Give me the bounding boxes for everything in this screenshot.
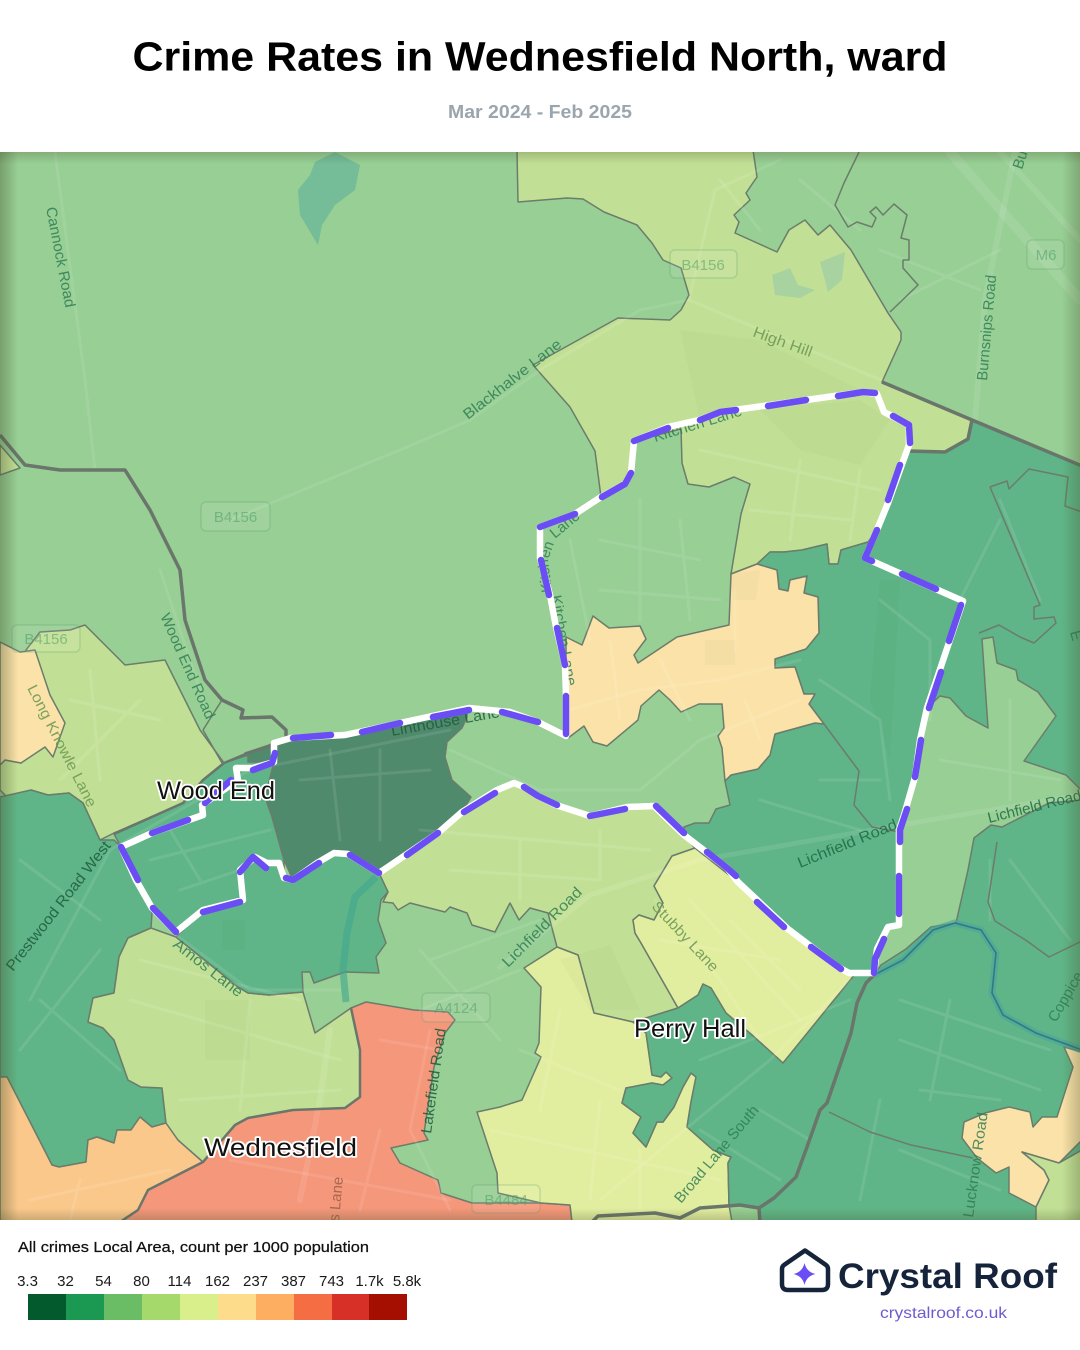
legend scale values (17, 1273, 422, 1290)
area: ward darkest green (245, 710, 471, 880)
area: east dark green (759, 420, 1080, 1222)
area: west dark green (0, 790, 166, 1167)
logo: Crystal Roof (782, 1250, 1057, 1322)
place labels: Wednesfield (204, 1134, 357, 1162)
title: Crime Rates in Wednesfield North, ward (132, 34, 948, 80)
legend scale values: 1.7k (355, 1273, 384, 1290)
road labels: Lichfield Road (986, 787, 1080, 827)
road labels: Long Knowle Lane (23, 682, 100, 810)
road labels: Linthouse Lane (390, 704, 501, 740)
subtitle: date range: Mar 2024 - Feb 2025 (448, 102, 632, 122)
road labels: Lucknow Road (960, 1111, 992, 1219)
road labels: Lichfield Road (499, 884, 586, 971)
thin local boundaries (203, 152, 1080, 1158)
area: ward inner east dark green (684, 542, 963, 973)
road labels (6, 152, 1080, 1220)
road shields (12, 240, 1064, 1213)
road labels: Wood End Road (156, 611, 218, 722)
area: north lime (517, 150, 972, 574)
road labels: Bu (1010, 149, 1031, 171)
area: west cream (0, 642, 65, 765)
road labels: Lakefield Road (418, 1027, 450, 1135)
road labels: Amos Lane (170, 936, 246, 1001)
place labels (157, 777, 746, 1162)
road labels: Kitchen Lane (538, 517, 580, 592)
legend title: All crimes Local Area, count per 1000 population (18, 1239, 369, 1256)
water: pond and lakes (298, 152, 845, 298)
area: far-west lime sliver (0, 445, 20, 475)
map edge vignette (0, 152, 1080, 1220)
area: dark green south of the ward's west arm (176, 853, 388, 995)
road labels: s Lane (326, 1176, 347, 1222)
thick district boundaries (0, 382, 1080, 1222)
legend scale values: 32 (57, 1273, 74, 1290)
place labels: Perry Hall (634, 1015, 746, 1043)
road labels: Stubby Lane (648, 898, 722, 976)
area: central lime (379, 783, 695, 1022)
area: Stubby Lane pale yellow (633, 848, 856, 1063)
road shields: B4156 (24, 631, 68, 648)
area: Wednesfield salmon (120, 1002, 572, 1222)
legend scale values: 743 (319, 1273, 344, 1290)
legend colour bar (28, 1294, 407, 1320)
road labels: High Hill (751, 324, 815, 361)
area: south-east lime (1022, 1150, 1080, 1222)
area: bottom dark strip (592, 1203, 762, 1220)
area: south-east cream (962, 1047, 1080, 1207)
road labels: Broad Lane South (671, 1102, 762, 1207)
legend (17, 1239, 422, 1320)
road labels: Lichfield Road (795, 816, 900, 872)
river (874, 923, 1080, 1050)
road shields: B4156 (214, 509, 257, 526)
area: Perry Hall dark green (622, 973, 874, 1208)
road labels: Blackhalve Lane (460, 336, 565, 423)
legend scale values: 5.8k (393, 1273, 422, 1290)
road shields: M6 (1036, 247, 1056, 264)
legend scale values: 80 (133, 1273, 150, 1290)
area: west lime (0, 625, 224, 840)
road shields: B4156 (681, 257, 725, 274)
road labels: Burnsnips Road (974, 274, 1000, 381)
subtle land-use patches (205, 330, 900, 1060)
area: lower-west lime (88, 928, 360, 1162)
road labels: Prestwood Road West (3, 837, 115, 974)
area: south pale yellow (477, 947, 732, 1222)
place labels: Wood End (157, 777, 275, 805)
area: ward cream highest-crime zone (566, 564, 824, 781)
area: eastern mid green (874, 637, 1080, 975)
base area: mid green (0, 152, 1080, 1220)
legend scale values: 114 (168, 1273, 191, 1290)
road labels: Kitchen Lane (547, 594, 580, 687)
legend scale values: 54 (95, 1273, 112, 1290)
road shields: A4124 (434, 1000, 478, 1017)
street network (20, 152, 1080, 1220)
choropleth map (0, 152, 1080, 1220)
road labels: Kitchen Lane (651, 403, 744, 446)
website url: crystalroof.co.uk (880, 1305, 1008, 1322)
legend scale values: 237 (243, 1273, 268, 1290)
legend scale values: 3.3 (17, 1273, 38, 1290)
area: south-west orange (0, 1077, 203, 1222)
logo wordmark: Crystal Roof (838, 1257, 1057, 1296)
icon: house with star (782, 1250, 828, 1290)
ward boundary: white line with purple dashes (121, 392, 963, 973)
road shields: B4484 (484, 1192, 528, 1209)
legend scale values: 162 (205, 1273, 230, 1290)
road labels: Cannock Road (42, 206, 78, 309)
area: ward west dark green (114, 755, 284, 932)
legend scale values: 387 (281, 1273, 306, 1290)
canal (343, 877, 376, 1002)
